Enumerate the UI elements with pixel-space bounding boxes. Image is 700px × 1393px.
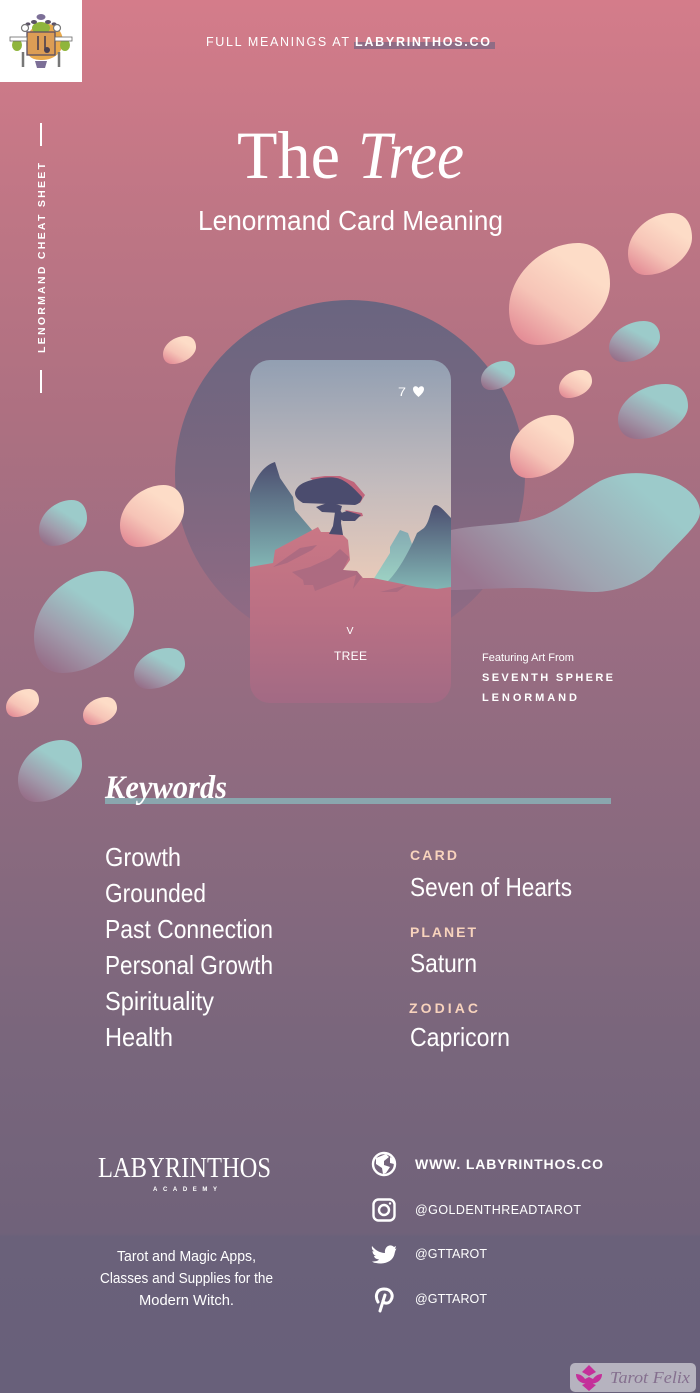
art credit: [482, 652, 613, 704]
heart icon: [413, 386, 424, 397]
keywords heading: Keywords: [104, 770, 227, 806]
side label: LENORMAND CHEAT SHEET: [36, 162, 48, 353]
rock shadow: [292, 549, 362, 591]
card number: 7: [398, 385, 406, 399]
header link: FULL MEANINGS AT: [206, 35, 349, 49]
title: The: [237, 117, 340, 193]
planet attribute: Saturn: [410, 948, 477, 978]
keywords list: Growth: [105, 842, 181, 872]
blobs: left cluster: [6, 336, 196, 802]
keywords list: Personal Growth: [105, 950, 273, 980]
art credit: LENORMAND: [482, 692, 577, 704]
website: WWW. LABYRINTHOS.CO: [415, 1156, 603, 1172]
twitter handle: @GTTAROT: [415, 1247, 487, 1261]
planet attribute: [410, 924, 477, 978]
keywords list: Health: [105, 1022, 173, 1052]
instagram handle: @GOLDENTHREADTAROT: [415, 1203, 581, 1217]
title: Tree: [358, 117, 464, 193]
tarot card: [250, 360, 451, 703]
keywords heading: [104, 770, 611, 806]
keywords list: Past Connection: [105, 914, 273, 944]
footer tagline: [100, 1249, 273, 1309]
rock streaks: [273, 545, 407, 592]
tree: [295, 476, 365, 535]
header link: [206, 35, 495, 49]
zodiac attribute: Capricorn: [410, 1022, 510, 1052]
card attribute: CARD: [410, 847, 457, 863]
pinterest handle: @GTTAROT: [415, 1292, 487, 1306]
tarot felix badge: [570, 1363, 696, 1392]
footer logo: [98, 1152, 271, 1193]
card name: TREE: [334, 649, 367, 663]
icon: twitter: [372, 1245, 396, 1264]
blobs: right cluster: [481, 213, 692, 478]
art credit: SEVENTH SPHERE: [482, 672, 613, 684]
left mountain: [250, 462, 312, 575]
footer logo: ACADEMY: [153, 1187, 217, 1193]
footer tagline: Classes and Supplies for the: [100, 1271, 273, 1287]
zodiac attribute: ZODIAC: [409, 1000, 478, 1016]
art credit: Featuring Art From: [482, 652, 574, 664]
ground and rock: [250, 527, 451, 703]
title: [237, 117, 464, 193]
header link: LABYRINTHOS.CO: [355, 35, 490, 49]
keywords list: [105, 842, 273, 1052]
icon: instagram: [374, 1200, 394, 1220]
logo box: [0, 0, 82, 82]
zodiac attribute: [409, 1000, 510, 1052]
subtitle: Lenormand Card Meaning: [198, 205, 503, 236]
tarot felix badge: Tarot Felix: [610, 1368, 690, 1387]
numeral: V: [346, 625, 354, 637]
footer logo: LABYRINTHOS: [98, 1152, 271, 1184]
middle mountain: [374, 530, 412, 581]
footer tagline: Modern Witch.: [139, 1293, 234, 1309]
planet attribute: PLANET: [410, 924, 476, 940]
wave blob: [451, 473, 700, 592]
icon: globe: [373, 1153, 395, 1175]
keywords list: Spirituality: [105, 986, 214, 1016]
right mountain: [387, 505, 451, 595]
card attribute: [410, 847, 572, 902]
keywords list: Grounded: [105, 878, 206, 908]
footer tagline: Tarot and Magic Apps,: [117, 1249, 256, 1265]
icon: pinterest: [376, 1289, 392, 1311]
backdrop circle: [175, 300, 525, 650]
card attribute: Seven of Hearts: [410, 872, 572, 902]
